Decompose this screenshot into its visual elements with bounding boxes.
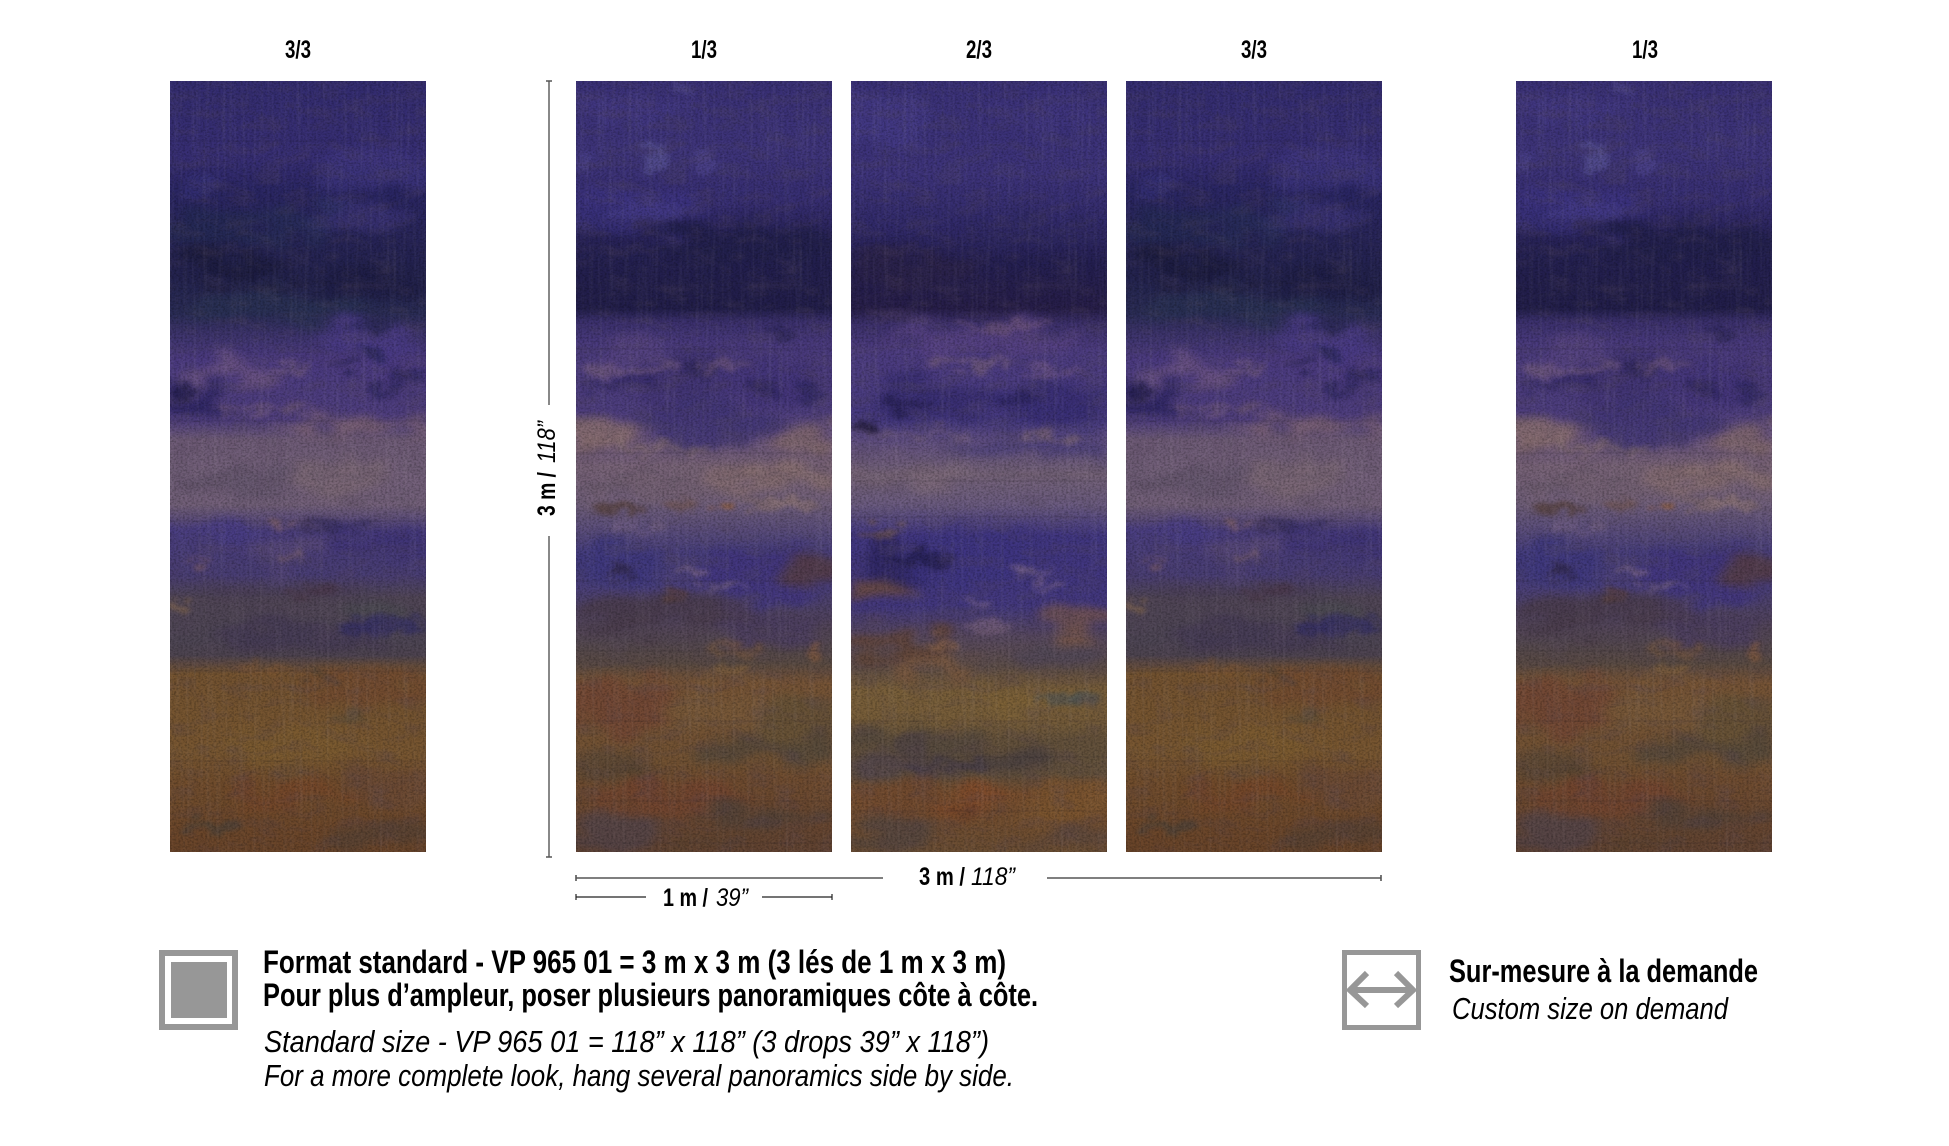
dimension: total width 3 m / 118 in: 118” [971, 863, 1017, 891]
text block: standard format: Standard size - VP 965 01 = 118” x 118” (3 drops 39” x 118”) [264, 1024, 989, 1059]
panel: right panoramic drop 1/3 [1496, 80, 1786, 854]
panel: left panoramic drop 3/3 [155, 81, 440, 852]
label: centre 1/3: 1/3 [691, 36, 717, 64]
dimension: vertical height 3 m / 118 in: 3 m / [533, 472, 561, 516]
label: centre 2/3: 2/3 [966, 36, 992, 64]
text block: custom size: Sur-mesure à la demande [1449, 953, 1758, 989]
dimension: vertical height 3 m / 118 in [533, 81, 561, 857]
label: right 1/3: 1/3 [1632, 36, 1658, 64]
text block: standard format: Pour plus d’ampleur, poser plusieurs panoramiques côte à côte. [263, 977, 1038, 1013]
icon: custom size arrow [1344, 952, 1418, 1028]
panel: centre panoramic drop 2/3 [831, 81, 1121, 853]
dimension: drop width 1 m / 39 in [576, 884, 832, 912]
text block: standard format [263, 944, 1038, 1093]
panel: centre panoramic drop 1/3 [556, 80, 846, 854]
text block: custom size [1449, 953, 1758, 1026]
text block: custom size: Custom size on demand [1452, 991, 1729, 1026]
dimension: drop width 1 m / 39 in: 39” [716, 884, 749, 912]
dimension: total width 3 m / 118 in [576, 863, 1381, 891]
dimension: vertical height 3 m / 118 in: 118” [533, 420, 561, 463]
text block: standard format: Format standard - VP 965 01 = 3 m x 3 m (3 lés de 1 m x 3 m) [263, 944, 1006, 980]
dimension: total width 3 m / 118 in: 3 m / [919, 863, 965, 891]
dimension: drop width 1 m / 39 in: 1 m / [663, 884, 708, 912]
label: left 3/3: 3/3 [285, 36, 311, 64]
label: centre 3/3: 3/3 [1241, 36, 1267, 64]
panel: centre panoramic drop 3/3 [1111, 81, 1396, 852]
text block: standard format: For a more complete look, hang several panoramics side by side. [264, 1058, 1014, 1093]
icon: standard format square [159, 950, 238, 1030]
